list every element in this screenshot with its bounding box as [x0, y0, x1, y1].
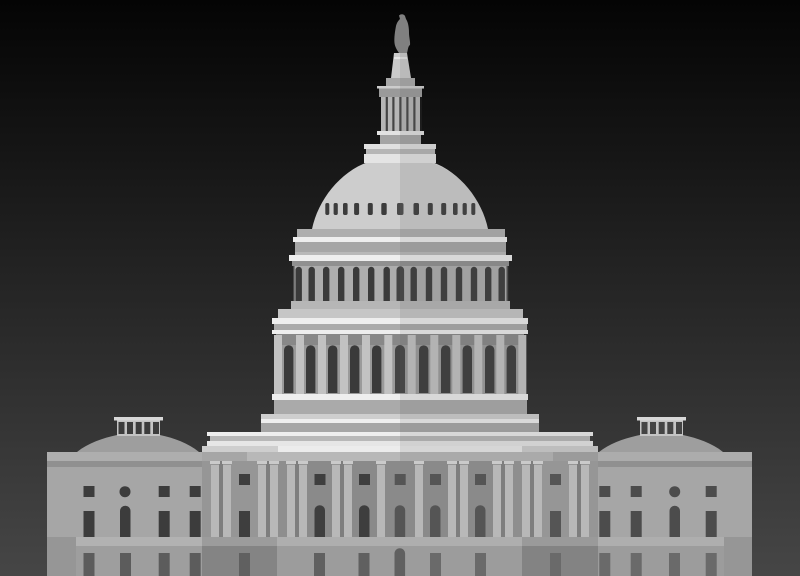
spire — [391, 53, 411, 78]
dome windows — [325, 203, 475, 215]
central steps and pediment — [202, 432, 598, 461]
portico lower wall — [202, 537, 598, 576]
portico windows — [239, 474, 561, 537]
right wing wall — [597, 467, 752, 537]
statue — [394, 14, 410, 53]
lower colonnade windows — [284, 345, 516, 393]
upper colonnade windows — [296, 266, 505, 301]
lantern — [377, 53, 424, 144]
drum lower tier — [261, 309, 539, 432]
left wing dome — [77, 435, 199, 452]
lantern columns — [381, 97, 420, 131]
right wing cornice — [597, 452, 752, 467]
right wing cupola — [637, 417, 686, 436]
right wing dome — [599, 435, 723, 452]
left wing cornice — [47, 452, 203, 467]
lower colonnade — [274, 334, 526, 394]
right wing lower wall — [597, 537, 752, 576]
portico columns — [211, 465, 589, 537]
left wing windows — [84, 486, 201, 576]
left wing wall — [47, 467, 203, 537]
main dome — [312, 162, 488, 229]
central portico — [202, 461, 598, 576]
left wing cupola — [114, 417, 163, 436]
right wing ledge — [597, 537, 724, 546]
column capitals — [210, 461, 590, 464]
portico wall — [202, 461, 598, 537]
left wing lower wall — [47, 537, 203, 576]
recessed panels — [219, 461, 581, 537]
portico lower windows — [239, 548, 561, 576]
lower colonnade columns — [274, 335, 526, 394]
drum upper tier — [289, 229, 512, 309]
right wing — [597, 417, 752, 576]
right wing windows — [599, 486, 717, 576]
left wing ledge — [76, 537, 203, 546]
dome base plates — [364, 144, 436, 163]
right half shading overlay — [400, 53, 598, 461]
left wing — [47, 417, 203, 576]
